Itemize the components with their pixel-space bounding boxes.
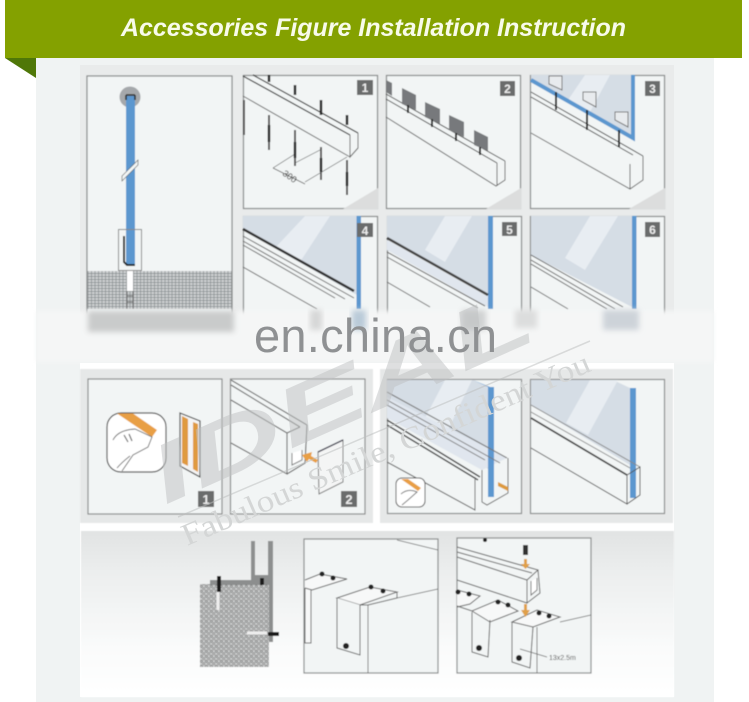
panel: step 3 (530, 75, 665, 209)
diagram: side mounted section (200, 541, 279, 667)
anchors and screws (244, 100, 347, 195)
orange arrows (521, 559, 530, 617)
number badge: 2 (345, 492, 353, 507)
number badge: 2 (504, 82, 511, 96)
icon: hand applying tape (107, 413, 166, 472)
anchor (127, 271, 133, 291)
number badge: 3 (649, 82, 656, 96)
number badge: 1 (362, 81, 369, 95)
section: wall mount diagrams (81, 531, 674, 697)
blue glass pane (126, 96, 135, 265)
panel: glass with clip fitted (387, 380, 522, 514)
panel: clip step 1 (88, 379, 222, 514)
title: Accessories Figure Installation Instruction (120, 14, 626, 42)
dimension: 300 (281, 168, 299, 185)
icon: small hand inset (396, 478, 425, 507)
blurred watermark band (36, 310, 714, 362)
panel: rail on brackets (456, 538, 591, 673)
panel: clip step 2 (230, 379, 365, 514)
screw (523, 545, 528, 555)
panel: glass installed (530, 379, 664, 514)
packers with arrows (549, 76, 628, 127)
arrow (302, 452, 318, 463)
panel: step 4 (243, 216, 378, 316)
panel: cross section of glass in base rail (87, 76, 232, 316)
panel: mounting brackets (304, 539, 438, 673)
panel: step 5 (387, 216, 522, 316)
header banner (5, 0, 742, 78)
upper diagram area (80, 65, 674, 315)
bolts (456, 538, 552, 661)
concrete block (200, 584, 269, 667)
panel: step 1 (243, 75, 378, 209)
bolts (320, 572, 386, 649)
plate (318, 440, 343, 494)
fold (5, 58, 36, 78)
panel: step 6 (530, 216, 664, 316)
number badge: 6 (649, 223, 656, 237)
group: left pair background (80, 369, 373, 523)
top cap (120, 86, 140, 108)
gasket (124, 236, 135, 265)
group: right pair background (380, 369, 673, 523)
watermark logo (135, 272, 590, 521)
U channel (118, 230, 142, 270)
watermark logo: IDEAL (135, 272, 547, 521)
icon: packer with tape (180, 413, 200, 477)
number badge: 5 (506, 223, 513, 237)
lower white backing (80, 363, 674, 697)
watermark slogan: Fabulous Smile, Confident You (176, 345, 595, 552)
number badge: 4 (362, 224, 369, 238)
number badge: 1 (202, 492, 210, 507)
glass packers (386, 80, 488, 151)
glass (531, 75, 633, 138)
floor hatching (88, 271, 232, 309)
panel: step 2 (386, 76, 521, 209)
glass break mark (122, 160, 138, 181)
steel angle (210, 580, 273, 642)
dimension note: 13x2.5m (549, 655, 576, 662)
U profile (251, 541, 273, 580)
watermark: en.china.cn: en.china.cn (254, 309, 497, 362)
bolts (219, 576, 279, 634)
